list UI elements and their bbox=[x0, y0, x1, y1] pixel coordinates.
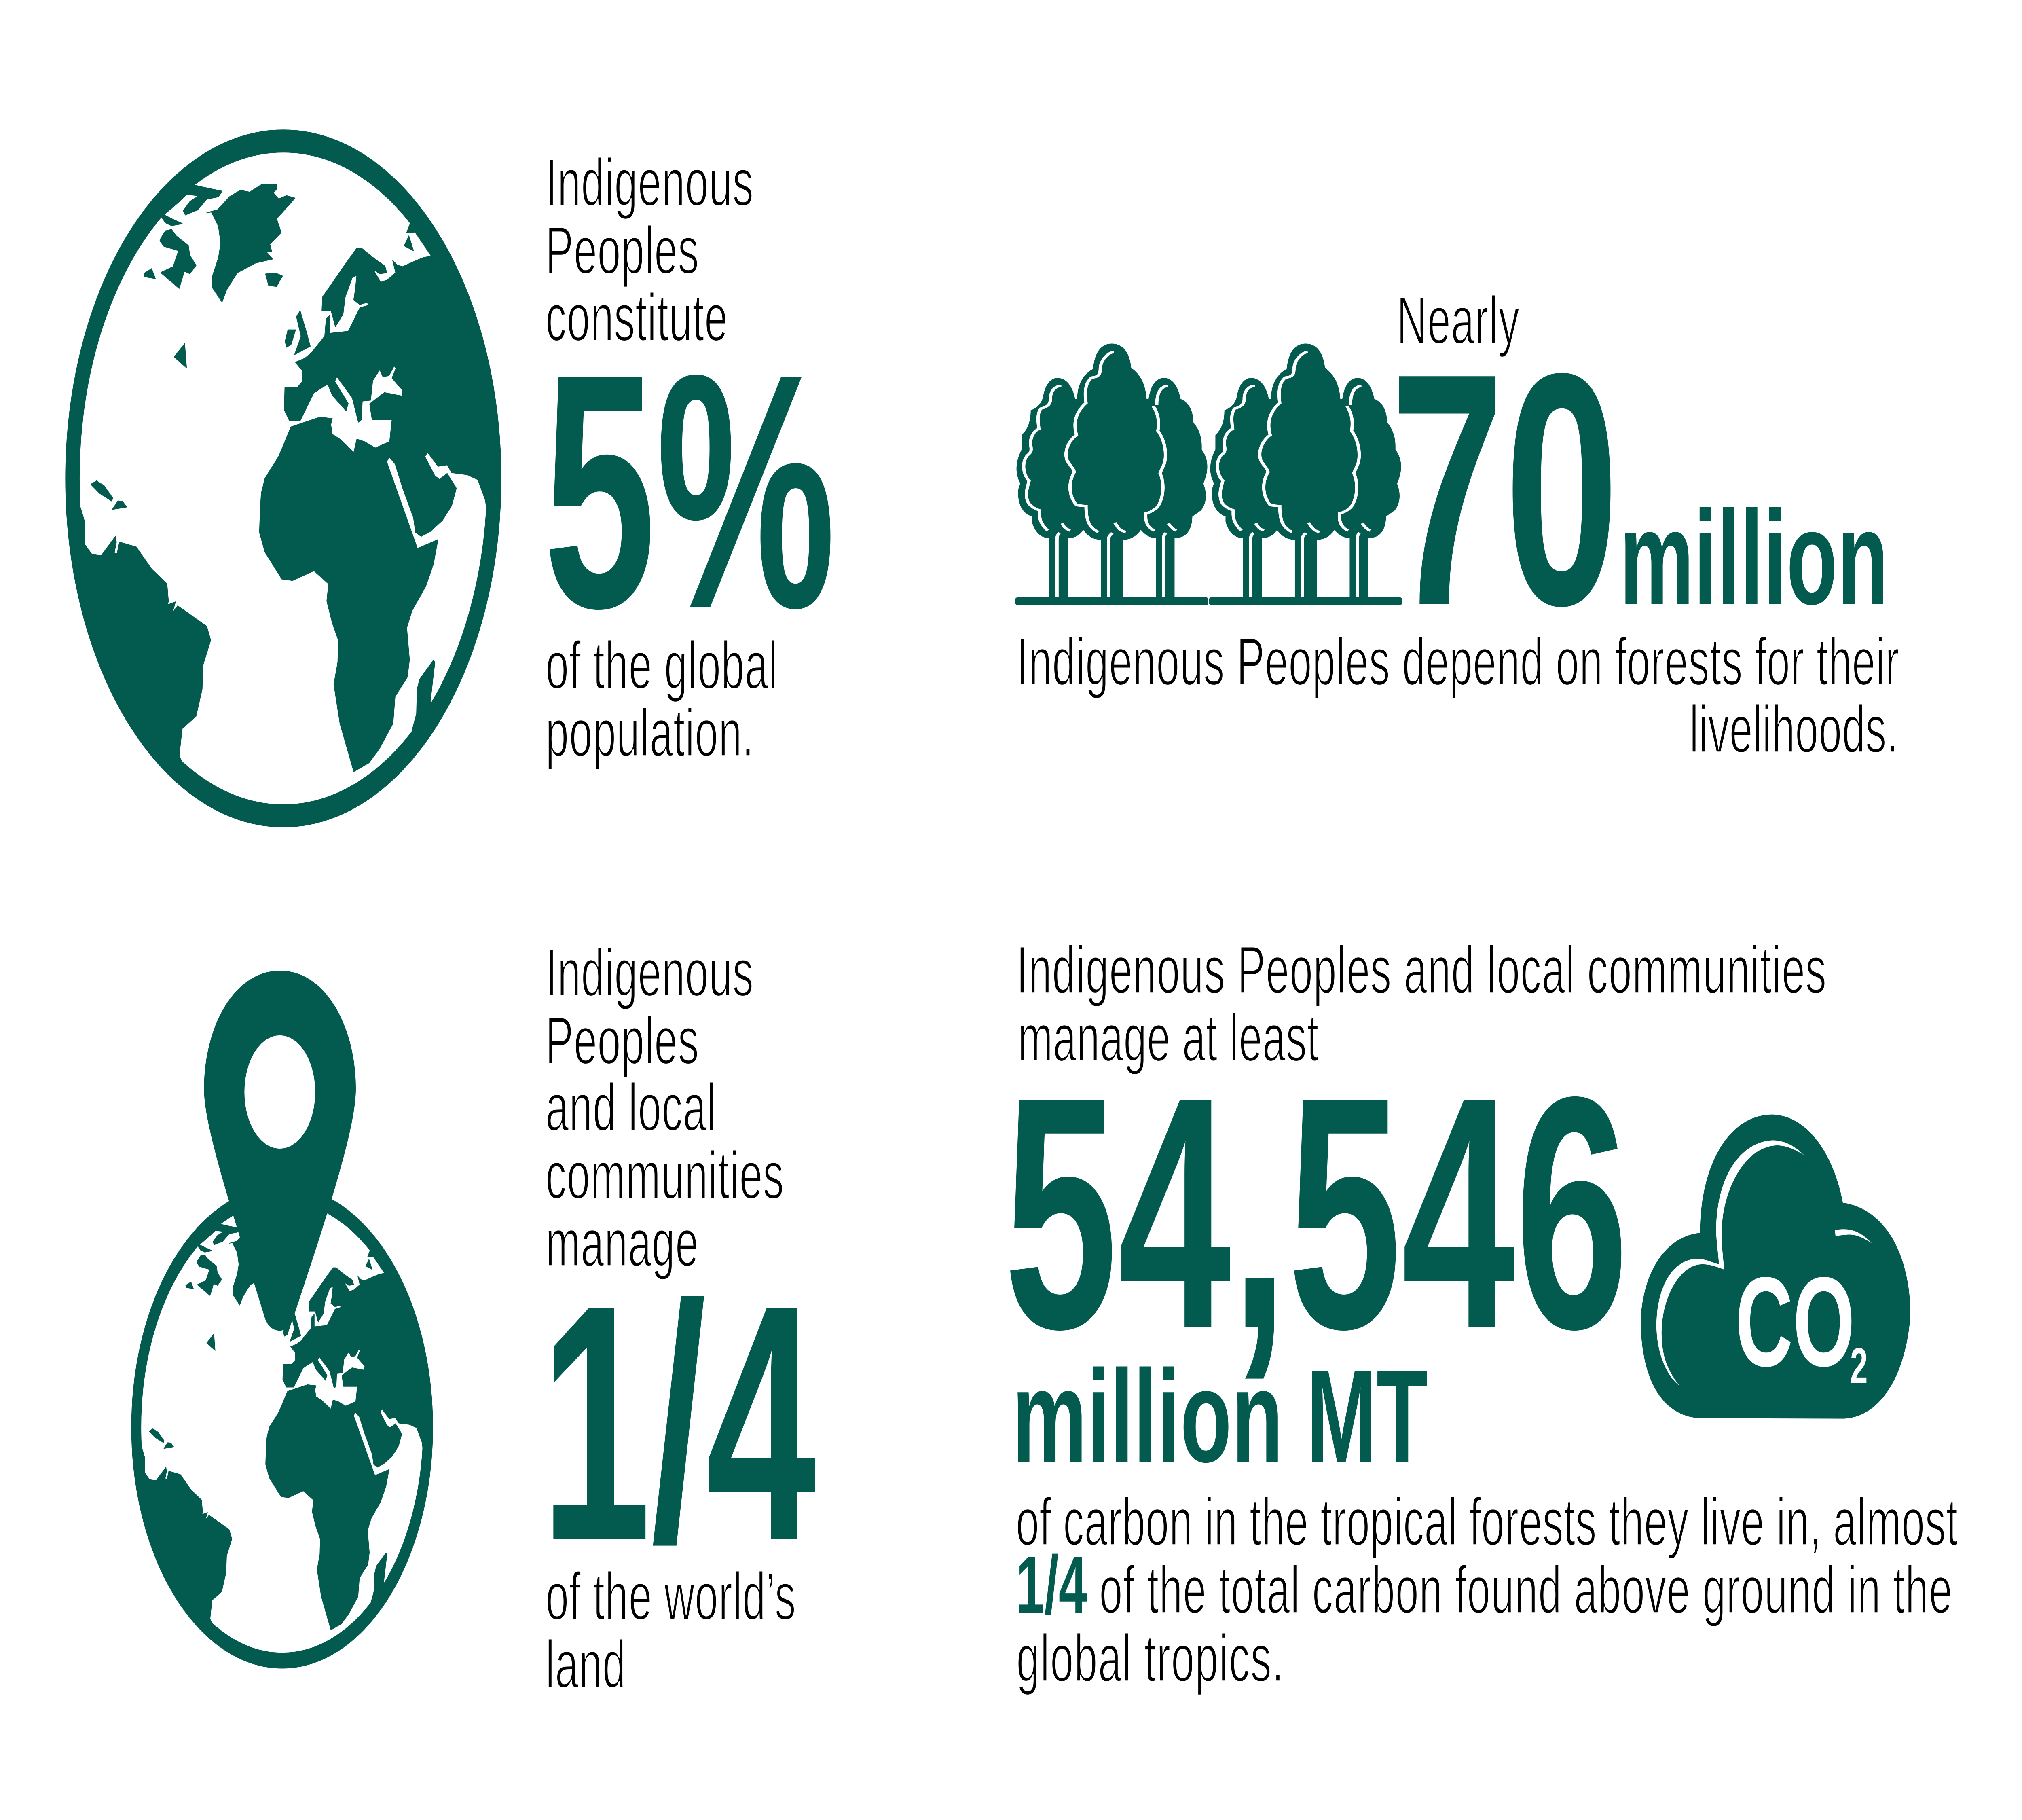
text: depend on forests: Indigenous Peoples depend on forests for their bbox=[1017, 624, 1899, 699]
icon: location pin bbox=[204, 971, 356, 1331]
big number: 1/4: 1/4 bbox=[541, 1236, 817, 1610]
panel: 5 percent of global population bbox=[544, 145, 836, 770]
highlight: 1/4: 1/4 bbox=[1016, 1539, 1087, 1630]
text: of the global population: of the global bbox=[546, 628, 778, 703]
text: of the world's land: land bbox=[546, 1627, 626, 1702]
text: of the global population: population. bbox=[546, 696, 754, 770]
text: of the world's land: of the world’s bbox=[546, 1559, 796, 1634]
panel: 70 million depend on forests bbox=[1017, 283, 1899, 767]
text: intro population: Peoples bbox=[546, 213, 699, 288]
big label: million: million bbox=[1620, 484, 1889, 633]
text: intro land: and local bbox=[546, 1070, 716, 1145]
text: of total carbon: of the total carbon found above ground in the bbox=[1099, 1553, 1952, 1627]
text: carbon in tropical forests: of carbon in the tropical forests they live in, almost bbox=[1016, 1485, 1958, 1560]
text: intro land: communities bbox=[546, 1138, 784, 1213]
big number: 70: 70 bbox=[1390, 305, 1619, 674]
big number: 54,546: 54,546 bbox=[1004, 1029, 1629, 1398]
big label: million MT: million MT bbox=[1012, 1343, 1428, 1490]
text: intro land: Peoples bbox=[546, 1003, 699, 1078]
icon: two groups of trees bbox=[1015, 343, 1402, 605]
icon: CO2 cloud bbox=[1641, 1115, 1910, 1419]
panel: one quarter of world's land bbox=[541, 935, 817, 1702]
text: livelihoods: livelihoods. bbox=[1690, 692, 1898, 767]
panel: 54,546 million MT of carbon bbox=[1004, 933, 1958, 1696]
text: intro carbon: Indigenous Peoples and local communities bbox=[1016, 933, 1826, 1007]
text: manage at least: manage at least bbox=[1018, 1001, 1319, 1075]
text: intro land: manage bbox=[546, 1206, 699, 1280]
icon: CO2 cloud: CO bbox=[1735, 1251, 1855, 1393]
text: intro population: Indigenous bbox=[546, 145, 754, 220]
text: intro population: constitute bbox=[546, 280, 728, 355]
icon: globe with location pin bbox=[125, 971, 437, 1661]
icon: globe bbox=[57, 141, 507, 817]
text: global tropics: global tropics. bbox=[1016, 1621, 1284, 1696]
icon: CO2 cloud: 2 bbox=[1850, 1338, 1868, 1395]
text: intro land: Indigenous bbox=[546, 935, 754, 1010]
text: nearly: Nearly bbox=[1397, 283, 1520, 358]
big number: 5%: 5% bbox=[544, 305, 836, 677]
